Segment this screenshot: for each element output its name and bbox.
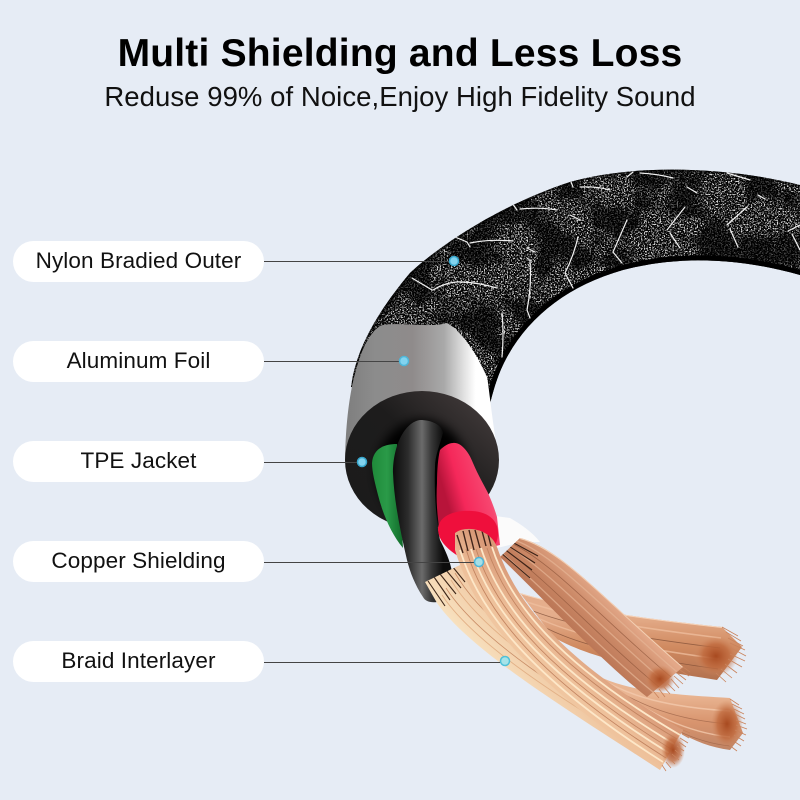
- aluminum foil layer: [345, 323, 499, 460]
- label: Aluminum Foil: [13, 341, 264, 382]
- leader line: Aluminum Foil: [264, 356, 408, 366]
- copper strands rear bundle, lower: [603, 678, 748, 752]
- braid chevrons: [412, 172, 800, 357]
- label: Copper Shielding: Copper Shielding: [51, 548, 226, 573]
- white paper wrap: [495, 516, 540, 548]
- black wire: [393, 420, 452, 602]
- red wire: [437, 443, 500, 555]
- green wire: [372, 444, 403, 548]
- copper strands red bundle: [455, 529, 690, 771]
- label: Nylon Bradied Outer: Nylon Bradied Outer: [36, 248, 241, 273]
- red wire opening: [438, 511, 498, 556]
- copper strands middle bundle: [500, 538, 690, 698]
- label: Aluminum Foil: Aluminum Foil: [67, 348, 210, 373]
- leader line: Copper Shielding: [264, 558, 484, 566]
- copper strands front bundle: [425, 565, 683, 770]
- label: TPE Jacket: [13, 441, 264, 482]
- label: TPE Jacket: TPE Jacket: [80, 448, 197, 473]
- label: Nylon Bradied Outer: [13, 241, 264, 282]
- label: Copper Shielding: [13, 541, 264, 582]
- label: Braid Interlayer: [13, 641, 264, 682]
- TPE jacket end face: [345, 391, 499, 529]
- leader line: TPE Jacket: [264, 458, 366, 466]
- leader line: Braid Interlayer: [264, 656, 510, 666]
- subtitle: Reduse 99% of Noice,Enjoy High Fidelity Sound: [104, 81, 696, 112]
- title: Multi Shielding and Less Loss: [118, 32, 682, 75]
- nylon braided outer jacket: [351, 170, 800, 402]
- copper strands rear bundle, upper: [520, 593, 746, 682]
- cable illustration: [264, 170, 800, 772]
- label: Braid Interlayer: Braid Interlayer: [61, 648, 216, 673]
- leader line: Nylon Bradied Outer: [264, 256, 458, 266]
